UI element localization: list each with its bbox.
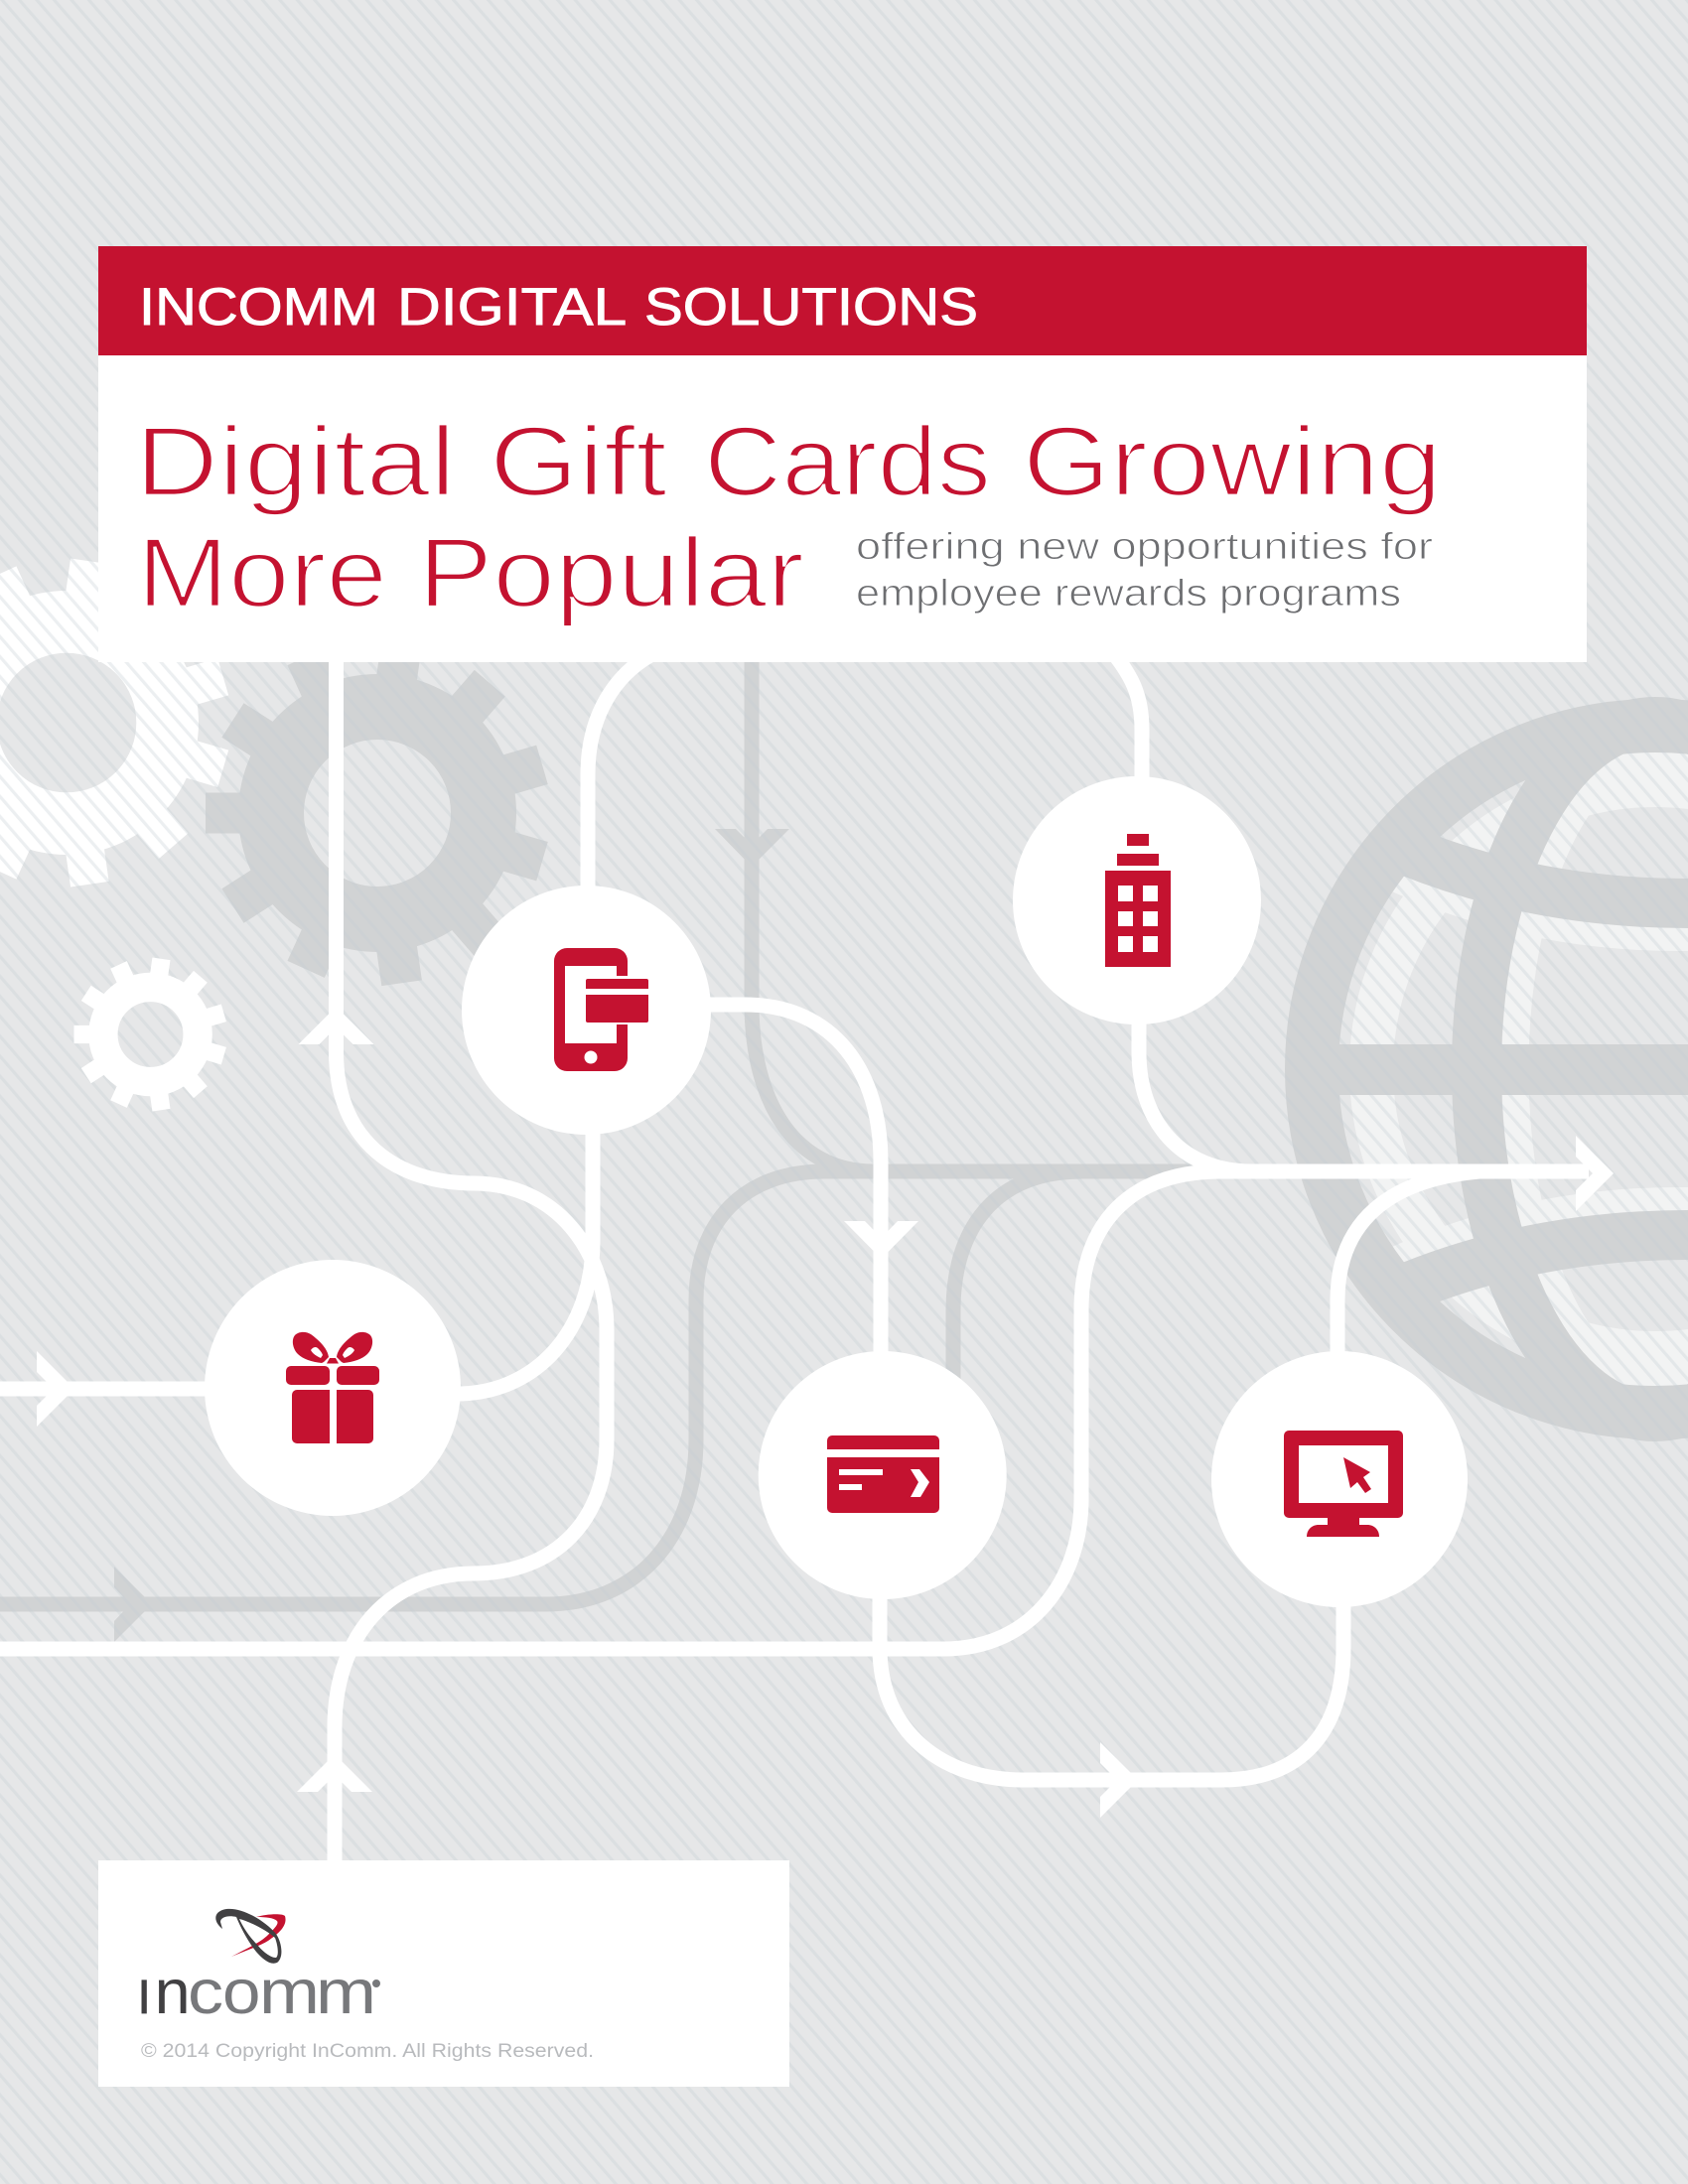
small white gear xyxy=(74,958,226,1111)
header text: DIGITAL xyxy=(397,278,626,337)
title: Cards xyxy=(704,406,991,516)
icon: gift box xyxy=(286,1332,379,1443)
header text: INCOMM xyxy=(139,278,378,337)
logo wordmark: c xyxy=(188,1958,223,2027)
title: Popular xyxy=(418,517,804,627)
subtitle: offering new opportunities for xyxy=(856,526,1433,568)
logo wordmark xyxy=(137,1958,380,2027)
logo mark xyxy=(215,1909,286,1964)
white connector lines xyxy=(0,645,1589,1866)
title panel xyxy=(98,246,1587,662)
grey connector lines xyxy=(0,655,1211,1604)
title: Growing xyxy=(1023,406,1442,516)
icon: office tower xyxy=(1105,834,1171,967)
header text: SOLUTIONS xyxy=(644,278,978,337)
logo panel xyxy=(98,1860,789,2087)
node: payment card xyxy=(759,1351,1007,1599)
icon: monitor with cursor xyxy=(1284,1431,1403,1537)
node: building xyxy=(1013,776,1261,1024)
title: Digital xyxy=(135,406,456,516)
arrow: white up above logo panel xyxy=(297,1754,372,1792)
logo wordmark: m xyxy=(316,1958,376,2027)
arrow: white up on left line xyxy=(298,1007,373,1044)
logo wordmark: o xyxy=(222,1958,260,2027)
title: More xyxy=(137,517,387,627)
logo wordmark: m xyxy=(259,1958,320,2027)
subtitle: employee rewards programs xyxy=(856,573,1401,614)
arrow: white down into card xyxy=(844,1221,918,1259)
arrow: white right bottom loop xyxy=(1100,1742,1138,1818)
logo wordmark: I xyxy=(137,1972,151,2024)
node: computer xyxy=(1211,1351,1468,1607)
logo wordmark: n xyxy=(155,1958,191,2027)
node: mobile wallet xyxy=(462,886,711,1135)
globe illustration xyxy=(1311,722,1688,1417)
arrow: white right main output xyxy=(1576,1136,1614,1211)
icon: phone with card xyxy=(554,948,648,1071)
icon: card with chevron xyxy=(827,1435,939,1513)
large grey gear xyxy=(206,640,548,986)
node: gift xyxy=(205,1260,461,1516)
title: Gift xyxy=(490,406,667,516)
arrow: grey right xyxy=(114,1567,152,1642)
header band xyxy=(98,246,1587,355)
large white gear xyxy=(0,559,228,887)
copyright: © 2014 Copyright InComm. All Rights Reserved. xyxy=(141,2040,594,2062)
arrow: white right on gift line xyxy=(37,1351,74,1427)
arrow: grey down xyxy=(715,829,789,867)
